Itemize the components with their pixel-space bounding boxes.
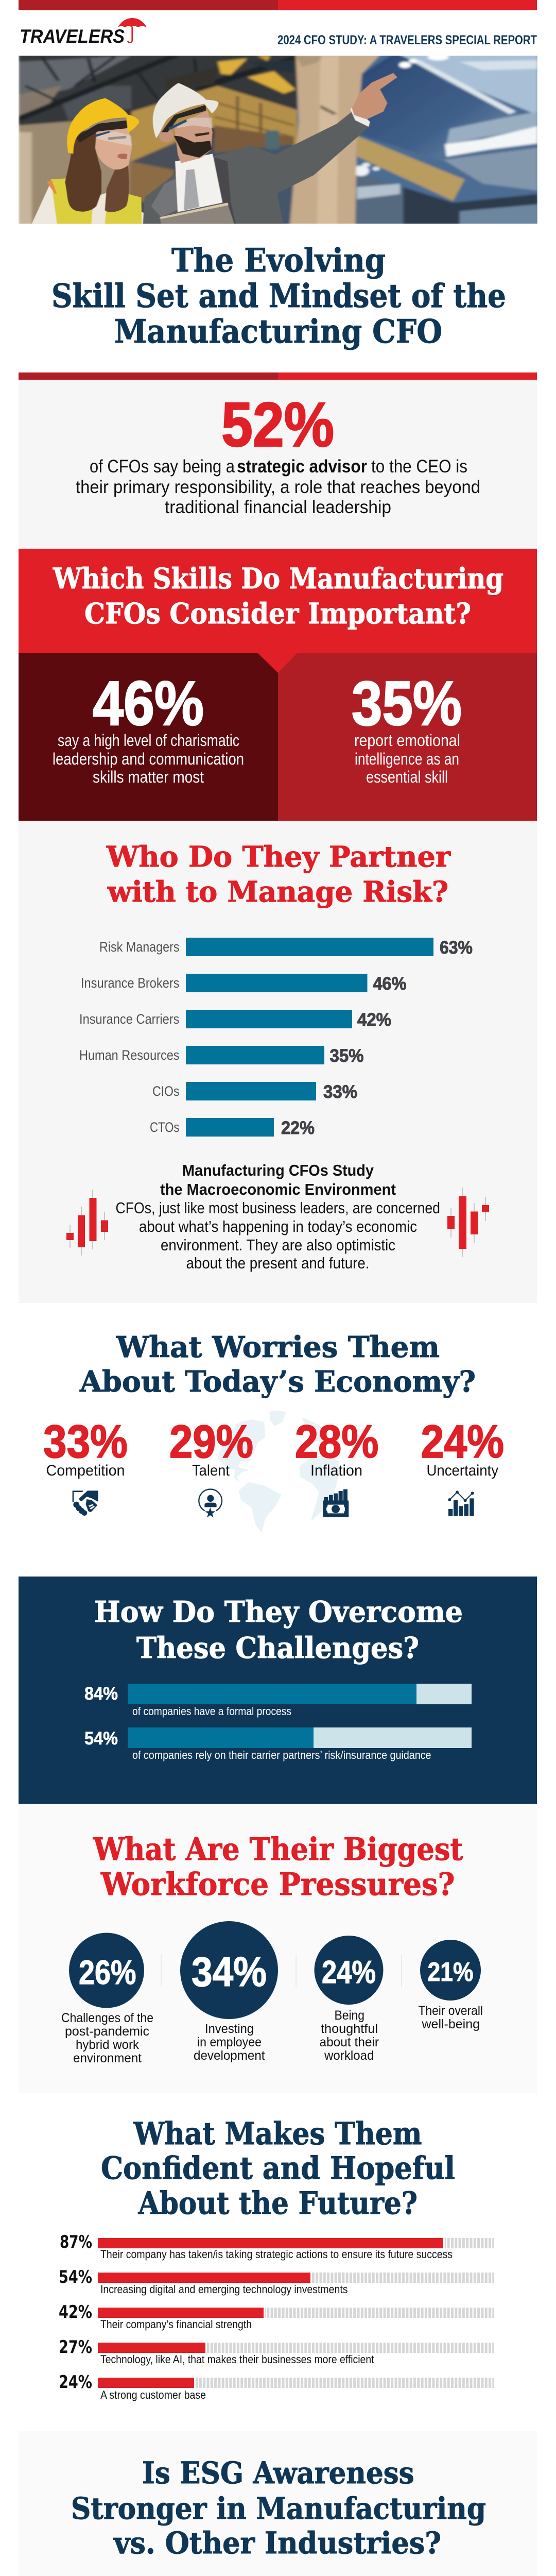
panel: 35 percent emotional intelligence: 35%: [352, 668, 462, 738]
text block: macroeconomic environment: [115, 1161, 440, 1272]
stat bubble: 21 percent well-being: [418, 1940, 483, 2031]
heading: confidence: What Makes Them: [133, 2116, 422, 2152]
panel: 35 percent emotional intelligence: essential skill: [366, 768, 448, 786]
heading: partners: with to Manage Risk?: [107, 875, 448, 908]
progress bar: carrier guidance 54 percent: of companies rely on their carrier partners’ risk/insurance guidance: [132, 1749, 431, 1761]
heading: skills: [53, 562, 503, 630]
text: strategic advisor description: to the CEO is: [371, 456, 467, 477]
progress row: 87 percent: Their company has taken/is taking strategic actions to ensure its future success: [100, 2248, 453, 2261]
progress row: 24 percent: 24%: [59, 2372, 92, 2393]
heading: workforce: Workforce Pressures?: [100, 1867, 455, 1903]
heading: ESG: [71, 2455, 486, 2561]
stat: inflation: 28%: [295, 1416, 379, 1468]
stat bubble: 24 percent workload: Being: [335, 2008, 364, 2023]
stat bubble: 26 percent hybrid work: environment: [73, 2051, 142, 2065]
progress row: 24 percent: [59, 2372, 494, 2401]
heading: worries: What Worries Them: [116, 1330, 440, 1364]
icon: talent badge: [199, 1489, 222, 1518]
man: [143, 111, 371, 224]
heading: worries: [79, 1330, 476, 1399]
progress row: 42 percent: Their company’s financial strength: [100, 2318, 252, 2331]
top colour bar: [19, 0, 537, 10]
stat: talent: Talent: [192, 1462, 230, 1479]
stat: talent: 29%: [169, 1416, 253, 1468]
text block: macroeconomic environment: environment. They are also optimistic: [161, 1236, 395, 1254]
panel: 46 percent charismatic leadership: [19, 653, 278, 821]
stat bubble: 34 percent employee development: in employee: [197, 2035, 262, 2049]
progress bar: carrier guidance 54 percent: [84, 1727, 472, 1761]
stat: competition: 33%: [43, 1416, 128, 1468]
icon: candlestick chart right: [447, 1188, 489, 1257]
heading: challenges: [94, 1595, 463, 1665]
progress bar: formal process 84 percent: of companies have a formal process: [132, 1705, 291, 1718]
heading: ESG: vs. Other Industries?: [113, 2526, 441, 2561]
bar chart: partners: 63%: [440, 938, 473, 958]
text block: macroeconomic environment: Manufacturing CFOs Study: [182, 1161, 374, 1179]
panel: 52 percent strategic advisor: [19, 380, 537, 549]
text: strategic advisor description: strategic advisor: [237, 456, 367, 477]
progress bar: formal process 84 percent: 84%: [84, 1684, 118, 1704]
text: strategic advisor description: traditional financial leadership: [165, 497, 391, 517]
progress row: 27 percent: Technology, like AI, that makes their businesses more efficient: [100, 2353, 374, 2366]
panel: risk partners: [19, 821, 537, 1303]
heading: confidence: [101, 2116, 455, 2222]
stat: uncertainty: Uncertainty: [426, 1462, 498, 1479]
stat bubble: 26 percent hybrid work: Challenges of the: [61, 2011, 153, 2025]
heading: confidence: About the Future?: [138, 2185, 418, 2222]
stat bubble: 26 percent hybrid work: [61, 1933, 153, 2065]
bar chart: partners: 35%: [329, 1046, 363, 1066]
panel: 46 percent charismatic leadership: say a high level of charismatic: [58, 731, 239, 750]
stat bubble: 26 percent hybrid work: 26%: [79, 1953, 136, 1991]
stat: inflation: [295, 1416, 379, 1517]
bar chart: partners: 46%: [373, 974, 407, 994]
progress row: 27 percent: 27%: [59, 2337, 92, 2358]
text: strategic advisor description: of CFOs say being a: [90, 456, 235, 477]
progress row: 54 percent: [59, 2267, 494, 2296]
progress row: 54 percent: Increasing digital and emerging technology investments: [100, 2283, 348, 2296]
stat bubble: 24 percent workload: 24%: [322, 1955, 376, 1990]
panel: 46 percent charismatic leadership: 46%: [93, 668, 204, 738]
heading: partners: [106, 840, 451, 908]
bar chart: partners: 22%: [281, 1118, 315, 1138]
progress row: 27 percent: [59, 2337, 494, 2366]
progress bar: carrier guidance 54 percent: 54%: [84, 1728, 118, 1749]
bar chart: partners: [79, 938, 473, 1138]
icon: money with rising bars: [323, 1489, 349, 1517]
panel: 46 percent charismatic leadership: leadership and communication: [53, 750, 244, 768]
text block: macroeconomic environment: about the present and future.: [186, 1254, 370, 1272]
heading: confidence: Confident and Hopeful: [101, 2150, 455, 2187]
progress row: 42 percent: 42%: [59, 2302, 92, 2323]
stat: competition: Competition: [46, 1462, 125, 1479]
heading: challenges: These Challenges?: [136, 1631, 419, 1665]
heading: ESG: Stronger in Manufacturing: [71, 2491, 486, 2526]
progress row: 24 percent: A strong customer base: [100, 2388, 206, 2401]
bar chart: partners: Human Resources: [79, 1047, 179, 1063]
heading: skills: Which Skills Do Manufacturing: [53, 562, 503, 595]
heading: workforce: What Are Their Biggest: [93, 1832, 463, 1868]
title: Skill Set and Mindset of the: [51, 277, 506, 315]
panel: 35 percent emotional intelligence: intelligence as an: [355, 750, 459, 768]
stat: talent: [169, 1416, 253, 1518]
stat: inflation: Inflation: [310, 1462, 362, 1479]
icon: handshake: [73, 1490, 98, 1516]
stat bubble: 24 percent workload: [314, 1936, 383, 2063]
stat bubble: 34 percent employee development: Investing: [205, 2022, 254, 2036]
pointer triangle: [257, 653, 298, 673]
progress row: 54 percent: 54%: [59, 2267, 92, 2287]
stat bubble: 34 percent employee development: development: [194, 2048, 265, 2063]
heading: ESG: Is ESG Awareness: [142, 2455, 414, 2490]
stat bubble: 26 percent hybrid work: hybrid work: [76, 2038, 139, 2052]
text: strategic advisor description: [76, 456, 480, 517]
section: confidence: [59, 2116, 494, 2401]
text: strategic advisor description: their primary responsibility, a role that reaches beyond: [76, 477, 480, 497]
bar chart: partners: Risk Managers: [99, 939, 179, 955]
progress row: 87 percent: [60, 2232, 494, 2261]
stat bubble: 21 percent well-being: 21%: [427, 1957, 474, 1987]
icon: chart with trend line: [448, 1490, 474, 1516]
heading: worries: About Today’s Economy?: [79, 1365, 476, 1399]
panel: 35 percent emotional intelligence: [278, 653, 537, 821]
panel: workforce pressures: [19, 1804, 537, 2093]
logo: Travelers: [20, 18, 147, 47]
title: [51, 241, 506, 350]
stat bubble: 24 percent workload: thoughtful: [321, 2022, 378, 2036]
divider bar: [19, 372, 537, 380]
title: Manufacturing CFO: [114, 312, 442, 350]
bar chart: partners: Insurance Brokers: [81, 975, 179, 991]
bar chart: partners: CIOs: [152, 1083, 179, 1099]
heading: workforce: [93, 1832, 463, 1903]
bar chart: partners: Insurance Carriers: [79, 1011, 179, 1027]
text block: macroeconomic environment: about what’s happening in today’s economic: [139, 1217, 417, 1235]
title: The Evolving: [171, 241, 386, 279]
panel: 35 percent emotional intelligence: report emotional: [354, 731, 460, 750]
stat: uncertainty: [421, 1416, 504, 1516]
heading: challenges: How Do They Overcome: [94, 1595, 463, 1629]
panel: important skills: [19, 549, 537, 821]
text block: macroeconomic environment: the Macroeconomic Environment: [160, 1180, 396, 1198]
hero photo: two managers in a factory: [19, 52, 540, 225]
stat bubble: 34 percent employee development: 34%: [192, 1949, 267, 1995]
decorative globe: [218, 1411, 339, 1533]
bar chart: partners: 33%: [323, 1082, 357, 1102]
stat bubble: 24 percent workload: about their: [319, 2035, 379, 2049]
progress bar: formal process 84 percent: [84, 1684, 472, 1718]
woman: [32, 185, 58, 224]
stat bubble: 24 percent workload: workload: [324, 2048, 374, 2063]
icon: candlestick chart left: [66, 1190, 108, 1256]
progress row: 87 percent: 87%: [60, 2232, 92, 2252]
progress row: 42 percent: [59, 2302, 494, 2331]
heading: partners: Who Do They Partner: [106, 840, 451, 873]
bar chart: partners: 42%: [357, 1010, 391, 1030]
stat bubble: 21 percent well-being: Their overall: [418, 2004, 483, 2018]
stat bubble: 34 percent employee development: [180, 1921, 278, 2063]
stat bubble: 21 percent well-being: well-being: [422, 2017, 480, 2031]
heading: skills: CFOs Consider Important?: [84, 597, 471, 630]
stat: competition: [43, 1416, 128, 1516]
panel: overcoming challenges: [19, 1577, 537, 1804]
section: economic worries: [43, 1330, 504, 1533]
stat: 52%: 52%: [221, 389, 334, 460]
panel: ESG awareness: [19, 2431, 537, 2576]
stat bubble: 26 percent hybrid work: post-pandemic: [65, 2024, 149, 2039]
panel: 46 percent charismatic leadership: skills matter most: [93, 768, 204, 786]
text block: macroeconomic environment: CFOs, just like most business leaders, are concerned: [115, 1199, 440, 1217]
bar chart: partners: CTOs: [150, 1120, 179, 1135]
stat: uncertainty: 24%: [421, 1416, 504, 1468]
logo: Travelers: TRAVELERS: [20, 26, 125, 47]
